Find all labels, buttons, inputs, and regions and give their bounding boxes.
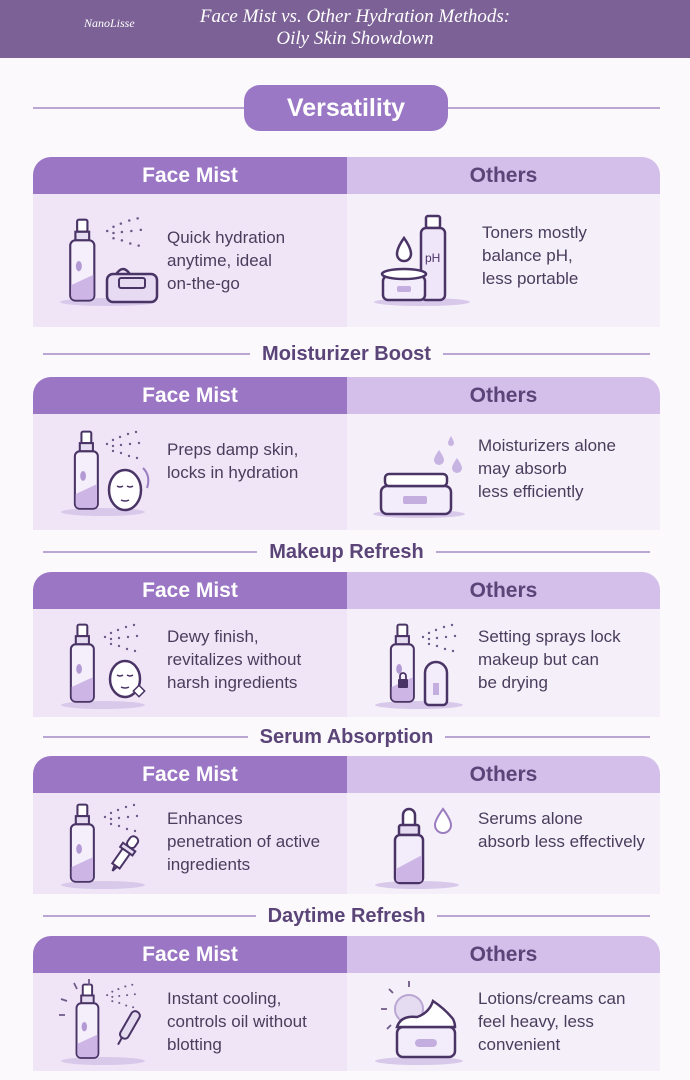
text: face mist versatility: anytime, ideal [167,251,272,270]
panel: serum absorption: Others [470,763,537,786]
icon: toner bottle, jar, pH [374,214,470,306]
panel: moisturizer boost: Face Mist [142,384,238,407]
text: others versatility [482,223,587,288]
text: others daytime: feel heavy, less [478,1012,594,1031]
panel: daytime refresh: Face Mist [142,943,238,966]
text: others daytime: Lotions/creams can [478,989,625,1008]
text: face mist versatility: Quick hydration [167,228,285,247]
heading: Versatility [244,85,448,131]
panel: makeup refresh: Others [470,579,537,602]
panel: makeup refresh: Face Mist [142,579,238,602]
text: face mist serum: penetration of active [167,832,320,851]
text: others makeup [478,627,621,692]
text: face mist moisturizer: locks in hydration [167,463,298,482]
panel: makeup refresh [33,572,660,717]
icon: spray bottle with face [61,624,146,709]
panel: daytime refresh: Others [470,943,537,966]
text: face mist serum: ingredients [167,855,250,874]
panel: serum absorption [33,756,660,894]
icon: serum dropper bottle [375,807,459,889]
text: others moisturizer: may absorb [478,459,567,478]
title [200,6,510,49]
header bar [0,0,690,58]
text: others versatility: less portable [482,269,578,288]
text: face mist daytime: blotting [167,1035,222,1054]
text: others serum: Serums alone [478,809,583,828]
text: face mist makeup: revitalizes without [167,650,301,669]
text: face mist moisturizer: Preps damp skin, [167,440,298,459]
icon: cooling spray bottle with dropper [59,979,145,1065]
title: Oily Skin Showdown [276,28,434,49]
text: others moisturizer: Moisturizers alone [478,436,616,455]
panel: moisturizer boost [33,377,660,530]
text: face mist daytime [167,989,307,1054]
panel: versatility [33,157,660,327]
text: face mist moisturizer [167,440,298,482]
panel: serum absorption: Face Mist [142,763,238,786]
panel: versatility: Face Mist [142,164,238,187]
text: others moisturizer [478,436,616,501]
text: others versatility: balance pH, [482,246,573,265]
logo: NanoLisse [84,16,135,30]
text: face mist serum: Enhances [167,809,243,828]
heading: Daytime Refresh: Daytime Refresh [268,904,425,926]
text: face mist daytime: controls oil without [167,1012,307,1031]
text: others makeup: be drying [478,673,548,692]
text: face mist versatility [167,228,285,293]
icon: spray bottle with face [61,430,150,516]
text: others versatility: Toners mostly [482,223,587,242]
panel: daytime refresh [33,936,660,1071]
text: face mist makeup: Dewy finish, [167,627,259,646]
text: others moisturizer: less efficiently [478,482,584,501]
icon: sun and cream jar [375,981,463,1065]
text: others makeup: makeup but can [478,650,599,669]
icon: moisturizer jar with drops [373,436,465,518]
text: others serum [478,809,645,851]
text: face mist serum [167,809,320,874]
icon: setting spray with lock [375,624,463,709]
panel: versatility: Others [470,164,537,187]
text: face mist versatility: on-the-go [167,274,240,293]
heading: Versatility: Versatility [287,94,405,122]
text: others daytime: convenient [478,1035,560,1054]
text: others daytime [478,989,625,1054]
text: others makeup: Setting sprays lock [478,627,621,646]
heading: Serum Absorption: Serum Absorption [260,726,433,748]
text: face mist daytime: Instant cooling, [167,989,281,1008]
heading: Makeup Refresh: Makeup Refresh [269,540,424,562]
text: face mist makeup [167,627,302,692]
panel: moisturizer boost: Others [470,384,537,407]
heading: Moisturizer Boost: Moisturizer Boost [262,342,431,364]
icon: toner bottle, jar, pH: pH [425,251,440,265]
text: others serum: absorb less effectively [478,832,645,851]
icon: spray bottle with bag [60,217,158,306]
title: Face Mist vs. Other Hydration Methods: [200,6,510,27]
text: face mist makeup: harsh ingredients [167,673,297,692]
icon: spray bottle with dropper [61,804,145,889]
